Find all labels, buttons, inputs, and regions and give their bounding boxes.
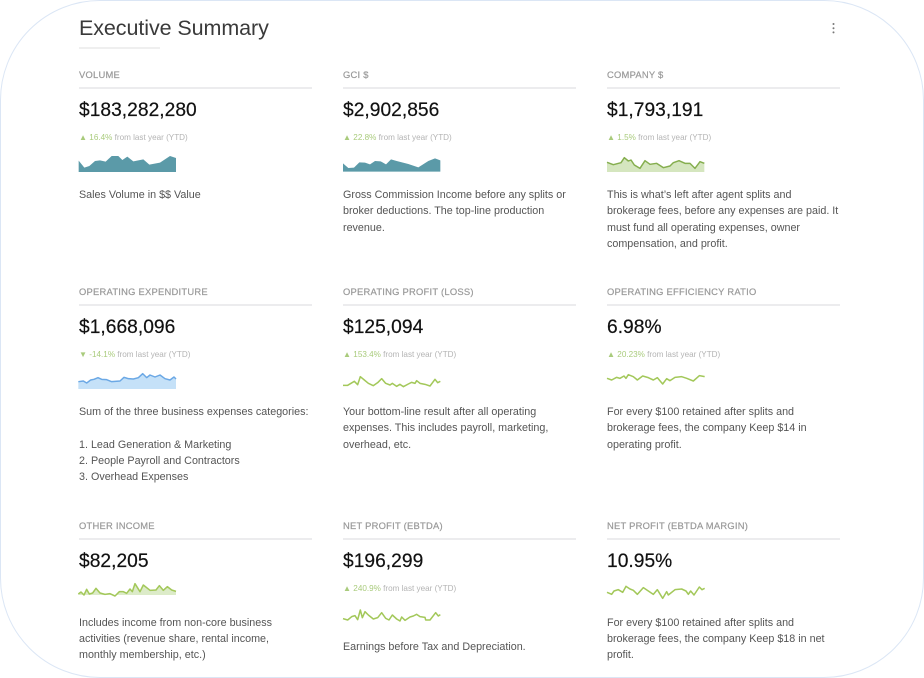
heading: GCI: GCI $ [343, 69, 369, 80]
value: company: $1,793,191 [607, 100, 703, 120]
sparkline: net profit margin [606, 586, 705, 600]
change: net profit: ▲ 240.9% from last year (YTD) [343, 584, 456, 593]
description: company [607, 189, 838, 250]
description: other income: Includes income from non-core business [79, 616, 272, 628]
description: operating efficiency ratio: operating profit. [607, 439, 682, 451]
description: GCI: broker deductions. The top-line production [343, 205, 544, 217]
panel: operating expenditure [78, 286, 312, 483]
panel: GCI [343, 69, 576, 234]
description: net profit margin: profit. [607, 649, 634, 661]
title: Executive Summary [79, 16, 269, 40]
description: operating expenditure: Sum of the three business expenses categories: [79, 406, 308, 418]
description: operating expenditure [79, 406, 308, 483]
sparkline: volume [78, 156, 176, 172]
description: operating profit: overhead, etc. [343, 439, 411, 451]
description: net profit margin [607, 616, 825, 661]
description: company: compensation, and profit. [607, 238, 728, 250]
description: operating expenditure: 3. Overhead Expenses [79, 471, 188, 483]
description: other income: monthly membership, etc.) [79, 649, 206, 661]
description: other income [79, 616, 272, 661]
description: operating expenditure: 2. People Payroll and Contractors [79, 455, 240, 467]
heading: other income: OTHER INCOME [79, 520, 155, 531]
description: volume: Sales Volume in $$ Value [79, 189, 201, 201]
heading: volume: VOLUME [79, 69, 120, 80]
description: operating efficiency ratio: For every $100 retained after splits and [607, 406, 794, 418]
description: operating profit [343, 406, 548, 451]
heading: company: COMPANY $ [607, 69, 664, 80]
panel: operating profit [343, 286, 576, 451]
value: volume: $183,282,280 [79, 100, 197, 120]
value: GCI: $2,902,856 [343, 100, 439, 120]
heading: operating profit: OPERATING PROFIT (LOSS) [343, 286, 474, 297]
panel: company [606, 69, 840, 250]
description: company: brokerage fees, before any expenses are paid. It [607, 205, 838, 217]
change: GCI: ▲ 22.8% from last year (YTD) [343, 133, 452, 142]
description: company: must fund all operating expenses, owner [607, 222, 800, 234]
description: GCI: revenue. [343, 222, 385, 234]
value: net profit: $196,299 [343, 550, 423, 572]
description: net profit margin: For every $100 retained after splits and [607, 616, 794, 628]
description: GCI: Gross Commission Income before any splits or [343, 189, 566, 201]
sparkline: GCI [343, 158, 440, 172]
heading: net profit: NET PROFIT (EBTDA) [343, 520, 443, 531]
panel: net profit [342, 520, 576, 652]
sparkline: net profit [342, 609, 441, 622]
description: net profit: Earnings before Tax and Depreciation. [343, 640, 526, 652]
change: company: ▲ 1.5% from last year (YTD) [607, 133, 711, 142]
heading: net profit margin: NET PROFIT (EBTDA MARGIN) [607, 520, 748, 531]
panel: net profit margin [606, 520, 840, 661]
change: operating expenditure: ▼ -14.1% from last year (YTD) [79, 350, 190, 359]
description: operating expenditure: 1. Lead Generation & Marketing [79, 439, 231, 451]
value: other income: $82,205 [79, 550, 149, 572]
value: operating efficiency ratio: 6.98% [607, 316, 662, 338]
panel: other income [78, 520, 312, 661]
sparkline: operating profit [343, 376, 441, 388]
description: operating efficiency ratio: brokerage fees, the company Keep $14 in [607, 422, 807, 434]
sparkline: company [606, 156, 705, 172]
description: other income: activities (revenue share, rental income, [79, 633, 269, 645]
description: operating profit: Your bottom-line result after all operating [343, 406, 536, 418]
icon: kebab menu [832, 23, 834, 34]
description: company: This is what’s left after agent splits and [607, 189, 791, 201]
panel: volume [78, 69, 312, 201]
description: operating profit: expenses. This includes payroll, marketing, [343, 422, 548, 434]
change: operating efficiency ratio: ▲ 20.23% from last year (YTD) [607, 350, 720, 359]
heading: operating efficiency ratio: OPERATING EFFICIENCY RATIO [607, 286, 756, 297]
change: operating profit: ▲ 153.4% from last year (YTD) [343, 350, 456, 359]
value: operating expenditure: $1,668,096 [79, 316, 175, 338]
heading: operating expenditure: OPERATING EXPENDITURE [79, 286, 208, 297]
sparkline: operating efficiency ratio [606, 374, 705, 385]
value: net profit margin: 10.95% [607, 550, 672, 572]
panel: operating efficiency ratio [606, 286, 840, 451]
sparkline: other income [78, 582, 176, 597]
description: GCI [343, 189, 566, 234]
sparkline: operating expenditure [78, 372, 176, 389]
change: volume: ▲ 16.4% from last year (YTD) [79, 133, 188, 142]
description: net profit margin: brokerage fees, the company Keep $18 in net [607, 633, 825, 645]
description: operating efficiency ratio [607, 406, 807, 451]
value: operating profit: $125,094 [343, 316, 423, 338]
